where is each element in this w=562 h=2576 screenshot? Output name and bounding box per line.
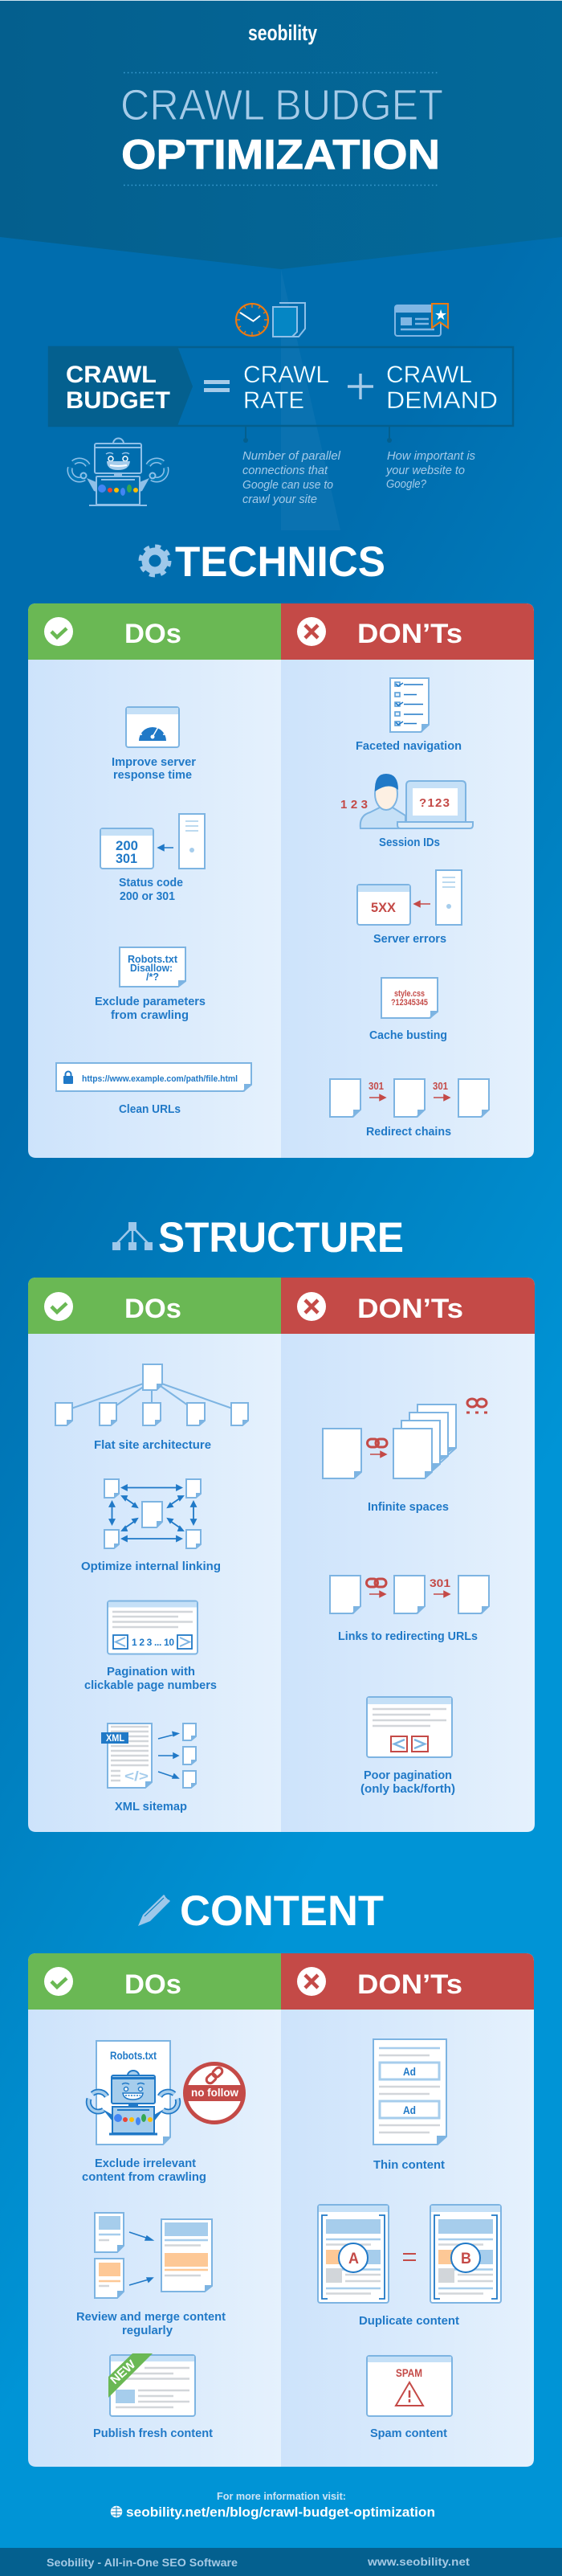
- item: publish fresh content: NEW: [108, 2357, 139, 2387]
- item: status code: [100, 814, 205, 903]
- crawl demand description: Google?: [386, 477, 427, 491]
- crawl rate: CRAWL: [243, 362, 329, 388]
- item: exclude irrelevant content: Exclude irrelevant: [95, 2157, 196, 2170]
- icon: website card with bookmark: [395, 304, 448, 336]
- item: cache busting: [369, 978, 447, 1042]
- item: review and merge: Review and merge content: [76, 2311, 226, 2324]
- equals: [204, 382, 230, 390]
- item: session IDs: 1 2 3: [340, 798, 368, 812]
- claw: left: [88, 2091, 112, 2121]
- panel: structure: [28, 1278, 535, 1832]
- item: session IDs: ?123: [419, 796, 450, 810]
- crawl demand description: How important is: [387, 449, 475, 463]
- header: DOs: [28, 1953, 281, 2010]
- item: links to redirecting URLs: 301: [430, 1576, 450, 1589]
- header: DOs: [28, 603, 281, 660]
- icon: clock and documents: [236, 303, 305, 337]
- icon: robot: [88, 2071, 178, 2134]
- item: improve server response time: Improve server: [112, 756, 196, 769]
- header: DON'Ts: [281, 1953, 534, 2010]
- heading: structure: STRUCTURE: [158, 1214, 404, 1261]
- header: DON'Ts: [281, 1278, 535, 1334]
- item: session IDs: [340, 774, 473, 849]
- crawl demand description: [385, 449, 475, 491]
- item: flat site architecture: Flat site architecture: [94, 1439, 211, 1452]
- item: redirect chains: [330, 1079, 490, 1139]
- header: DOs: DOs: [124, 1294, 181, 1324]
- item: clean URLs: Clean URLs: [119, 1103, 181, 1116]
- icon: robot: [70, 439, 166, 505]
- item: exclude irrelevant content: Robots.txt: [110, 2050, 157, 2062]
- formula box: [48, 346, 513, 426]
- item: spam content: [367, 2356, 452, 2440]
- header: DON'Ts: [281, 603, 534, 660]
- page A: [318, 2205, 389, 2303]
- item: server errors: Server errors: [373, 933, 446, 946]
- icon: website card with bookmark: ★: [434, 307, 447, 323]
- header: DON'Ts: DON’Ts: [357, 619, 462, 649]
- title: [120, 81, 443, 178]
- plus: [348, 374, 373, 399]
- item: status code: 200 or 301: [120, 890, 175, 903]
- item: poor pagination: Poor pagination: [364, 1769, 452, 1782]
- item: infinite spaces: [323, 1399, 487, 1514]
- item: publish fresh content: [93, 2353, 213, 2440]
- item: exclude irrelevant content: [82, 2041, 244, 2184]
- item: cache busting: Cache busting: [369, 1029, 447, 1042]
- footer bar: [0, 2548, 562, 2576]
- item: faceted navigation: [356, 678, 462, 753]
- item: review and merge: [76, 2213, 226, 2337]
- item: XML sitemap: </>: [124, 1768, 149, 1784]
- item: session IDs: Session IDs: [379, 836, 440, 849]
- icon: globe: [111, 2507, 122, 2517]
- item: server errors: 5XX: [371, 900, 397, 915]
- heading: technics: TECHNICS: [175, 538, 385, 586]
- item: server errors: [357, 870, 462, 946]
- item: XML sitemap: XML: [106, 1732, 124, 1744]
- page B: B: [461, 2251, 471, 2267]
- footer bar: www.seobility.net: [367, 2555, 470, 2568]
- item: infinite spaces: Infinite spaces: [368, 1501, 449, 1514]
- icon: gear: [140, 546, 169, 575]
- crawl budget: BUDGET: [66, 387, 170, 414]
- title: CRAWL BUDGET: [120, 81, 443, 129]
- crawl demand description: your website to: [385, 464, 465, 477]
- item: redirect chains: 301: [433, 1080, 448, 1092]
- page A: A: [348, 2251, 359, 2267]
- icon: no follow badge: no follow: [191, 2086, 238, 2099]
- item: thin content: Ad: [403, 2104, 416, 2116]
- item: improve server response time: [112, 707, 196, 782]
- item: exclude parameters: [95, 947, 206, 1022]
- item: exclude irrelevant content: content from crawling: [82, 2171, 206, 2184]
- item: thin content: Thin content: [373, 2159, 445, 2172]
- crawl rate: [243, 362, 329, 414]
- item: pagination with page numbers: Pagination with: [107, 1666, 195, 1678]
- item: status code: 301: [116, 851, 137, 866]
- crawl rate description: Number of parallel: [242, 449, 341, 463]
- item: optimize internal linking: [81, 1479, 221, 1573]
- item: redirect chains: Redirect chains: [366, 1126, 451, 1139]
- item: duplicate content: [318, 2205, 501, 2328]
- icon: no follow badge: [185, 2063, 244, 2123]
- footer: more information: For more information visit:: [217, 2490, 346, 2502]
- item: faceted navigation: Faceted navigation: [356, 740, 462, 753]
- crawl rate description: [242, 449, 341, 506]
- header band: [0, 1, 562, 269]
- item: links to redirecting URLs: Links to redirecting URLs: [338, 1630, 478, 1643]
- logo: seobility: [248, 21, 317, 45]
- footer: more information: seobility.net/en/blog/crawl-budget-optimization: [126, 2504, 435, 2520]
- icon: site tree: [112, 1222, 153, 1250]
- crawl demand: CRAWL: [386, 362, 472, 388]
- item: improve server response time: response time: [113, 769, 192, 782]
- crawl budget: CRAWL: [66, 362, 157, 388]
- item: status code: Status code: [119, 877, 183, 889]
- crawl demand: [386, 362, 498, 414]
- claw: right: [154, 2091, 178, 2121]
- item: thin content: [373, 2039, 447, 2172]
- item: clean URLs: [56, 1063, 252, 1116]
- title: OPTIMIZATION: [121, 132, 440, 178]
- crawl rate: RATE: [243, 387, 304, 414]
- item: exclude parameters: /*?: [146, 971, 159, 983]
- panel: technics: [28, 603, 534, 1158]
- item: exclude parameters: Exclude parameters: [95, 996, 206, 1008]
- item: duplicate content: Duplicate content: [359, 2315, 459, 2328]
- item: redirect chains: 301: [369, 1080, 384, 1092]
- item: optimize internal linking: Optimize internal linking: [81, 1560, 221, 1573]
- header: DON'Ts: DON’Ts: [357, 1969, 462, 2000]
- crawl budget: [66, 362, 170, 414]
- icon: pencil: [138, 1895, 170, 1926]
- page B: [430, 2205, 501, 2303]
- header: DOs: [28, 1278, 281, 1334]
- item: XML sitemap: XML sitemap: [115, 1801, 187, 1813]
- item: clean URLs: https://www.example.com/path/file.html: [82, 1074, 238, 1084]
- item: review and merge: regularly: [122, 2325, 173, 2337]
- item: exclude parameters: from crawling: [111, 1009, 189, 1022]
- item: links to redirecting URLs: [330, 1576, 490, 1643]
- item: exclude parameters: Robots.txt: [128, 953, 178, 965]
- item: poor pagination: [360, 1697, 455, 1796]
- item: thin content: Ad: [403, 2065, 416, 2078]
- item: cache busting: style.css: [394, 989, 425, 999]
- item: flat site architecture: [55, 1364, 249, 1452]
- item: spam content: SPAM: [396, 2367, 422, 2379]
- item: poor pagination: (only back/forth): [360, 1783, 455, 1796]
- item: exclude parameters: Disallow:: [130, 962, 173, 974]
- header: DOs: DOs: [124, 619, 181, 649]
- panel: content: [28, 1953, 534, 2467]
- item: publish fresh content: Publish fresh content: [93, 2427, 213, 2440]
- footer bar: Seobility - All-in-One SEO Software: [47, 2556, 238, 2569]
- crawl rate description: Google can use to: [242, 478, 333, 492]
- item: pagination with page numbers: 1 2 3 ... 10: [132, 1637, 174, 1648]
- claw: right: [140, 460, 166, 492]
- item: XML sitemap: [101, 1723, 197, 1813]
- header: DOs: DOs: [124, 1969, 181, 2000]
- item: cache busting: ?12345345: [391, 998, 428, 1008]
- crawl rate description: connections that: [242, 464, 328, 477]
- item: pagination with page numbers: [84, 1601, 217, 1692]
- header: DON'Ts: DON’Ts: [357, 1294, 463, 1324]
- item: pagination with page numbers: clickable page numbers: [84, 1679, 217, 1692]
- item: status code: 200: [116, 838, 138, 853]
- footer: more information: [111, 2490, 435, 2520]
- crawl rate description: crawl your site: [242, 493, 317, 506]
- claw: left: [70, 460, 96, 492]
- item: spam content: Spam content: [370, 2427, 447, 2440]
- crawl demand: DEMAND: [386, 387, 498, 414]
- heading: content: CONTENT: [180, 1887, 384, 1935]
